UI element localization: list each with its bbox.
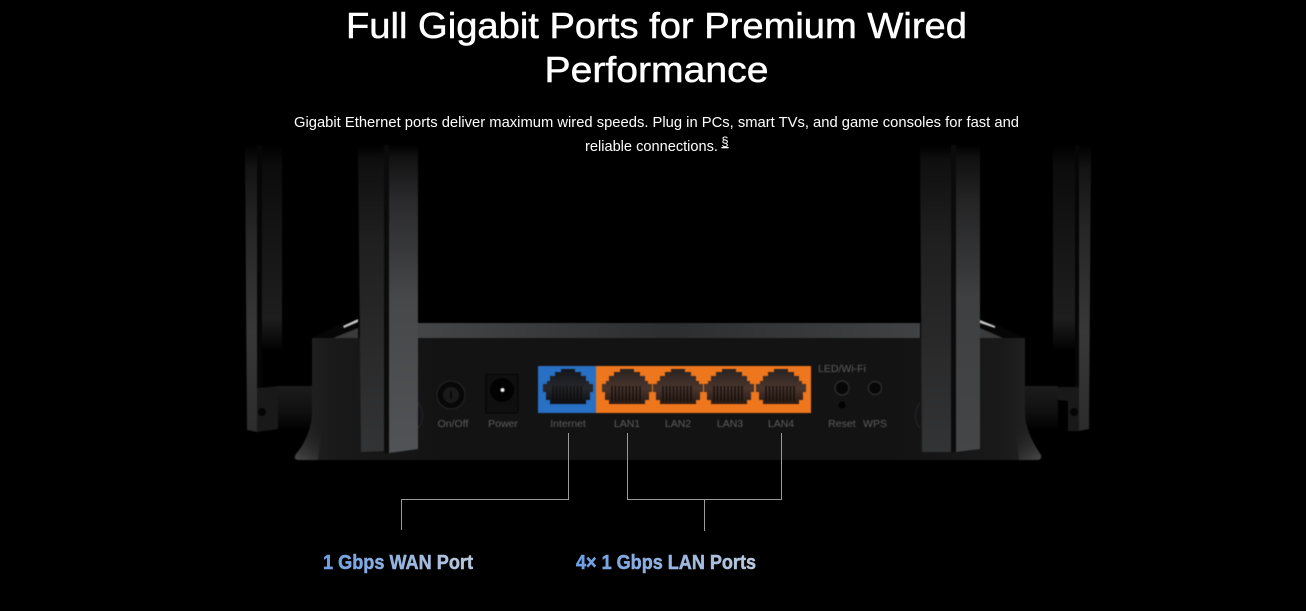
description: Gigabit Ethernet ports deliver maximum wired speeds. Plug in PCs, smart TVs, and game consoles for fast and (294, 115, 1019, 131)
port labels (438, 363, 887, 430)
power socket (486, 374, 518, 413)
description: § (721, 134, 729, 149)
port labels: On/Off (438, 418, 468, 430)
port labels: LAN3 (717, 418, 743, 430)
port labels: LAN2 (665, 418, 691, 430)
port labels: Power (488, 418, 518, 430)
near left antenna (358, 145, 418, 453)
port labels: WPS (863, 418, 887, 430)
lan connector lines (628, 433, 782, 531)
port labels: LAN4 (768, 418, 794, 430)
on/off switch (437, 381, 465, 409)
lan label: 4× 1 Gbps LAN Ports (576, 552, 756, 574)
description (294, 115, 1019, 155)
wan label: 1 Gbps WAN Port (323, 552, 473, 574)
router body (295, 338, 1041, 460)
wan connector line (402, 433, 568, 530)
far left antenna (245, 145, 312, 432)
router lid (312, 323, 1025, 338)
port labels: Internet (550, 418, 586, 430)
title (346, 5, 967, 90)
title: Performance (544, 49, 768, 90)
internet port (538, 366, 596, 413)
port labels: Reset (828, 418, 856, 430)
near right antenna (920, 145, 980, 452)
far right antenna (1025, 145, 1091, 431)
title: Full Gigabit Ports for Premium Wired (346, 5, 967, 46)
lan ports (596, 366, 811, 413)
router illustration (245, 145, 1091, 460)
description: reliable connections. (585, 139, 718, 155)
port labels: LED/Wi-Fi (818, 363, 866, 375)
reset and wps buttons (835, 381, 882, 408)
port labels: LAN1 (614, 418, 640, 430)
